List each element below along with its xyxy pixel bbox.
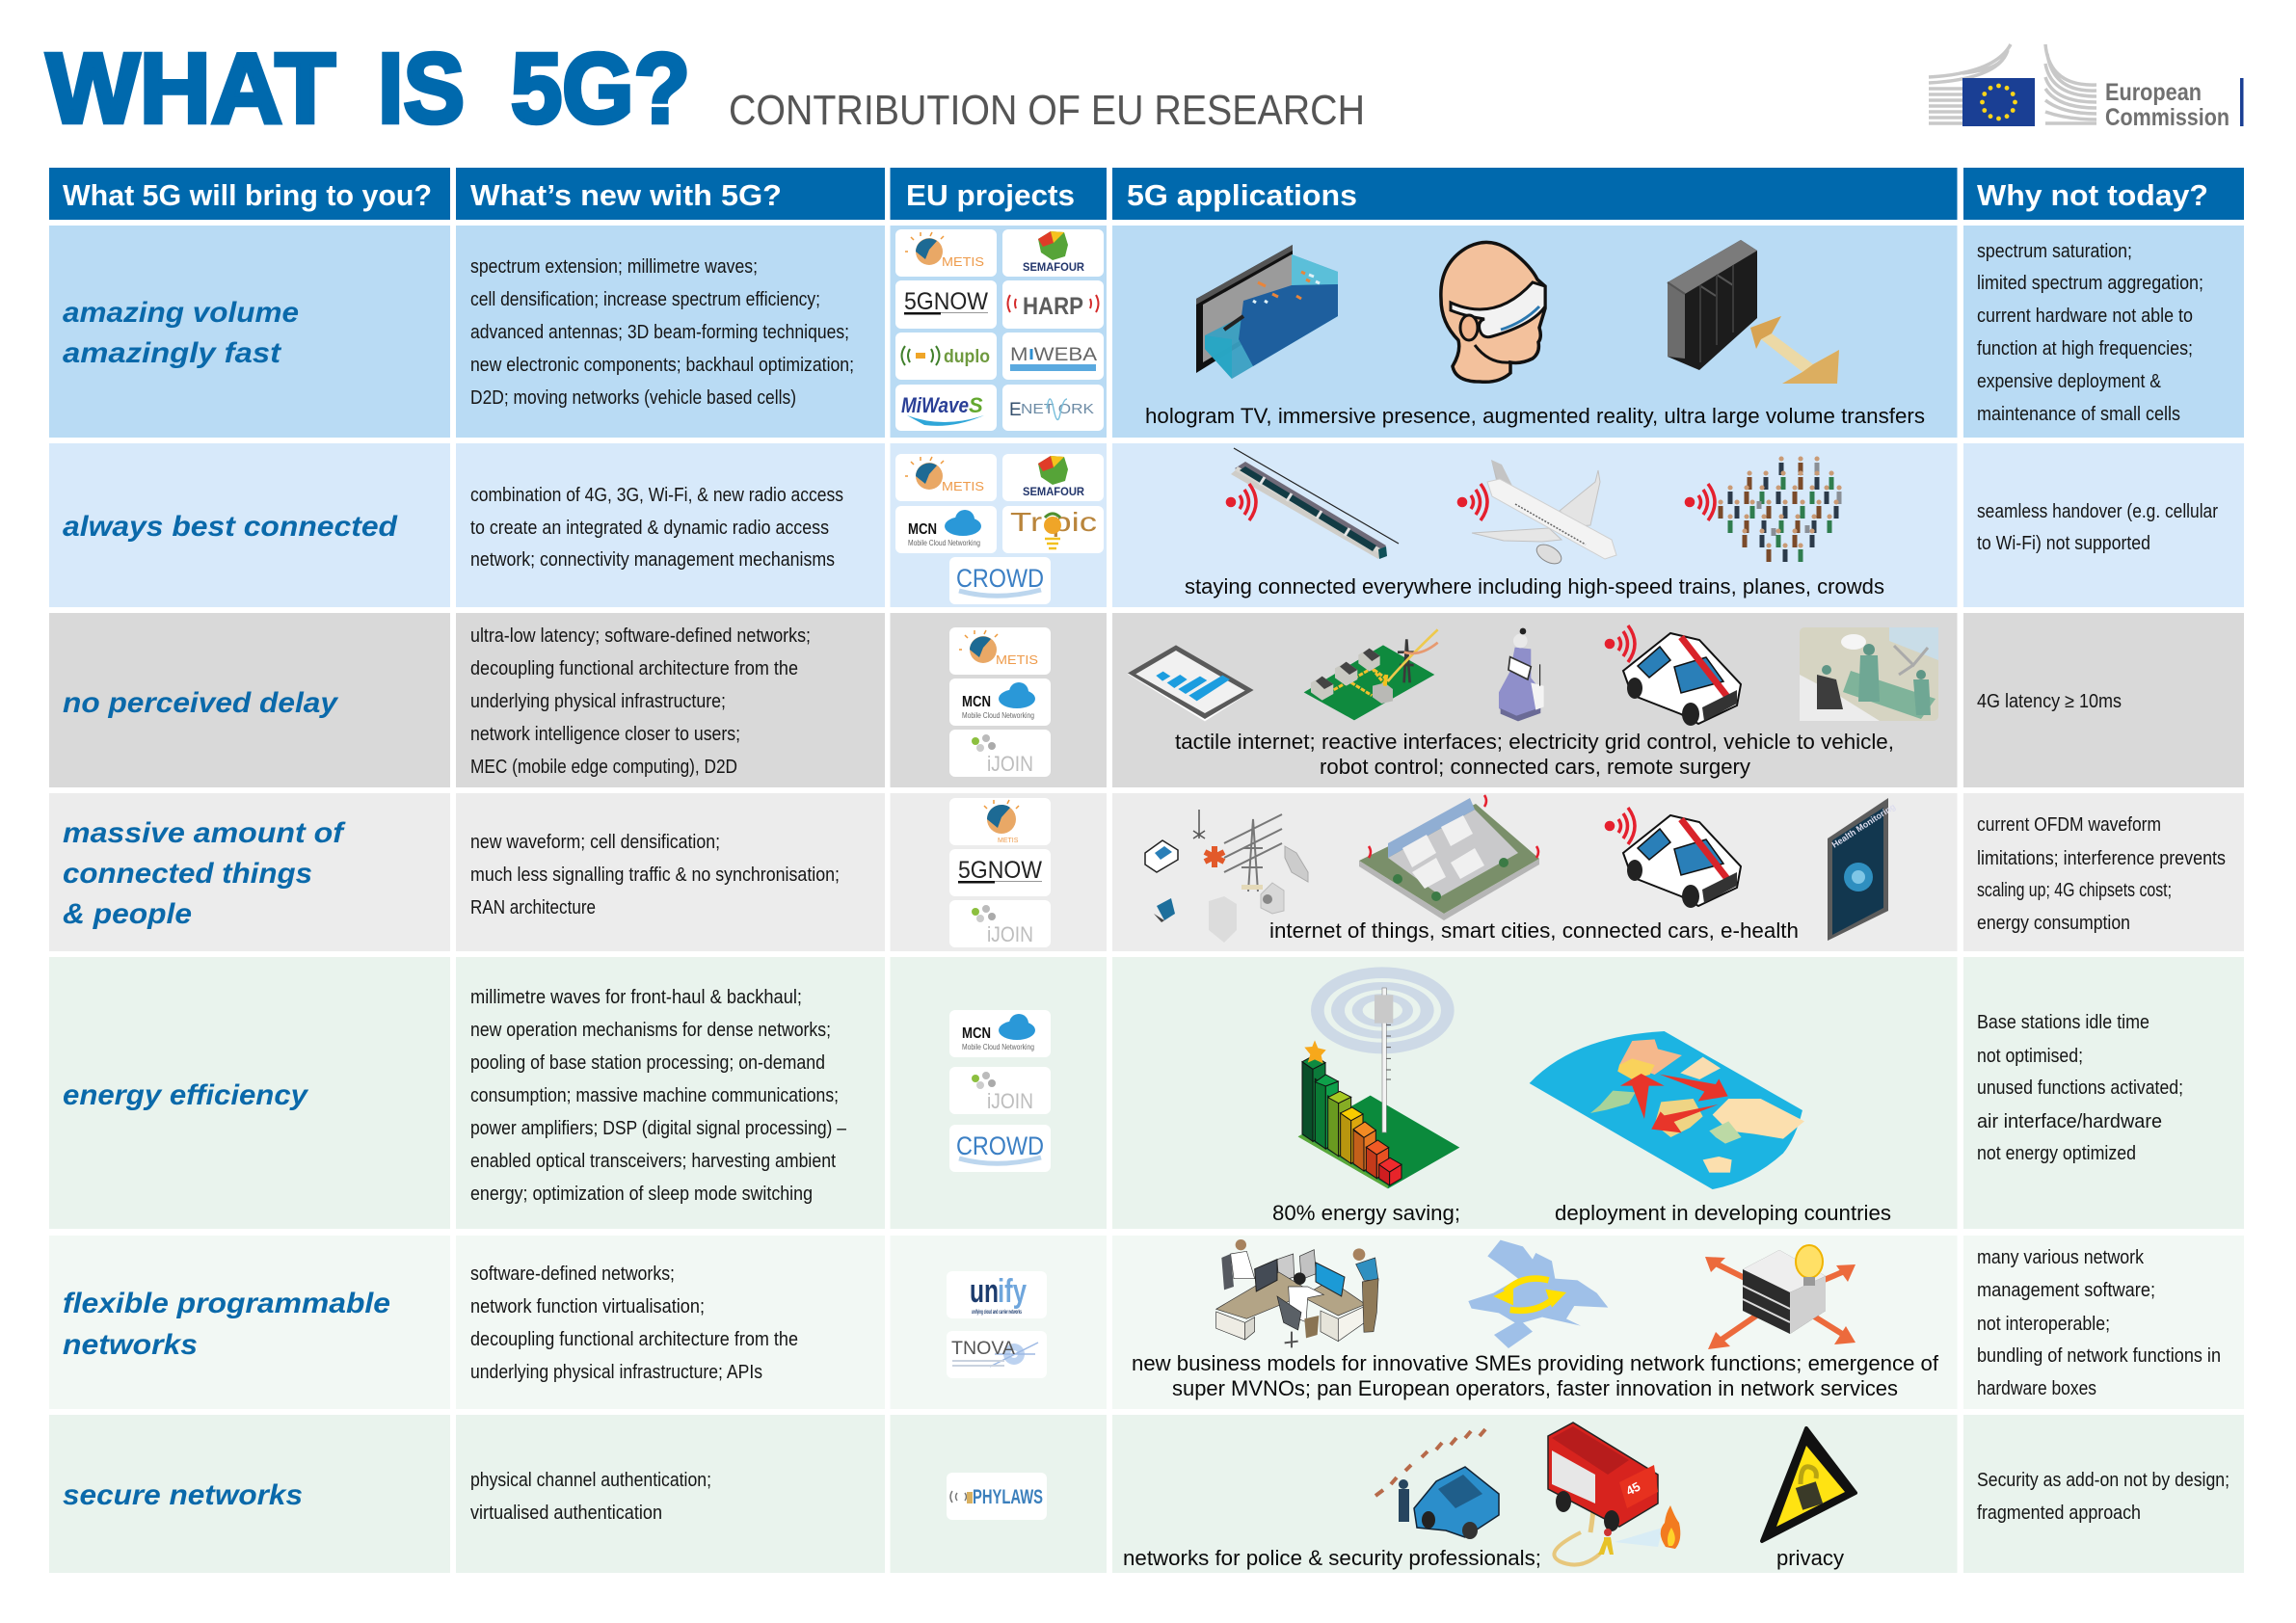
what's new text: enabled optical transceivers; harvesting ambient (470, 1151, 836, 1172)
why not today text: fragmented approach (1977, 1503, 2141, 1524)
icon: fire truck and firefighter: 45 (1623, 1479, 1642, 1499)
icon: tactile tablet (1128, 645, 1254, 721)
what's new text: software-defined networks; (470, 1264, 675, 1285)
icon: police car and officer (1375, 1429, 1499, 1539)
project logos (895, 229, 1104, 431)
logo: MiWEBA (1002, 333, 1104, 380)
project logos (949, 798, 1051, 947)
icon: antenna and energy bars (1298, 967, 1459, 1188)
icon: fire truck and firefighter (1548, 1423, 1680, 1565)
what's new text: MEC (mobile edge computing), D2D (470, 757, 737, 778)
what's new text: new operation mechanisms for dense networks; (470, 1020, 831, 1041)
why not today text: current hardware not able to (1977, 306, 2193, 327)
label: flexible programmable (63, 1288, 390, 1319)
label: energy efficiency (63, 1079, 308, 1111)
logo: iJOIN (949, 1067, 1051, 1114)
label: no perceived delay (63, 687, 338, 719)
logo: E3NETWORK (1002, 385, 1104, 431)
logo: MCN: MCN (962, 1025, 991, 1042)
logo: CROWD: CROWD (956, 1131, 1044, 1160)
what's new text: underlying physical infrastructure; APIs (470, 1362, 762, 1383)
heading: 5G applications: 5G applications (1127, 178, 1357, 212)
title: IS (378, 33, 465, 144)
why not today text: current OFDM waveform (1977, 814, 2161, 836)
icon: Europe map with circular arrows (1468, 1240, 1608, 1348)
logo: 5GNOW (949, 849, 1051, 896)
icon: electricity grid (1304, 629, 1438, 720)
row 1: amazing volume, amazingly fast (49, 226, 2244, 438)
applications: VR head (1441, 242, 1545, 382)
icon: connected car with signal (1605, 808, 1741, 908)
why not today text: expensive deployment & (1977, 371, 2162, 392)
logo: European Commission (1929, 44, 2244, 131)
logo: iJOIN: iJOIN (987, 1089, 1033, 1113)
logo: 5GNOW: 5GNOW (904, 288, 988, 315)
what's new text: new waveform; cell densification; (470, 832, 720, 853)
label: amazing volume (63, 297, 299, 329)
logo: METIS (895, 229, 997, 277)
what's new text: to create an integrated & dynamic radio access (470, 518, 829, 539)
label (63, 817, 346, 930)
logo: METIS: METIS (942, 254, 984, 269)
why not today text: maintenance of small cells (1977, 404, 2180, 425)
why not today text (1977, 501, 2218, 554)
logo: MCN (895, 506, 997, 553)
caption: deployment in developing countries (1555, 1201, 1891, 1225)
why not today text: management software; (1977, 1280, 2155, 1301)
logo: unify: un (970, 1273, 999, 1310)
logo: METIS (949, 627, 1051, 675)
why not today text: scaling up; 4G chipsets cost; (1977, 880, 2172, 901)
logo: SEMAFOUR (1002, 454, 1104, 501)
why not today text: air interface/hardware (1977, 1111, 2162, 1132)
row 6: flexible programmable networks (49, 1236, 2244, 1409)
what's new text: advanced antennas; 3D beam-forming techniques; (470, 322, 849, 343)
logo: MiWaveS: MiWave (901, 393, 969, 417)
logo: duplo (895, 333, 997, 380)
logo: SEMAFOUR (1002, 229, 1104, 277)
logo: European Commission: Commission (2105, 104, 2229, 131)
logo: MiWEBA: M WEBA (1010, 345, 1097, 365)
heading: EU projects: EU projects (906, 178, 1075, 212)
logo: MiWaveS: S (969, 393, 983, 417)
icon: e-health tablet: Health Monitoring (1830, 802, 1897, 850)
label: massive amount of (63, 817, 346, 849)
icon: connected car with signal (1605, 625, 1741, 726)
why not today text (1977, 1247, 2221, 1399)
title: 5G? (511, 33, 690, 144)
logo: CROWD (949, 557, 1051, 604)
why not today text: spectrum saturation; (1977, 241, 2132, 262)
caption: networks for police & security professionals; (1123, 1546, 1541, 1570)
caption: staying connected everywhere including high-speed trains, planes, crowds (1185, 574, 1884, 599)
caption: super MVNOs; pan European operators, faster innovation in network services (1172, 1376, 1898, 1400)
what's new text (470, 485, 843, 571)
what's new text: RAN architecture (470, 897, 596, 918)
logo: METIS small: METIS (998, 838, 1019, 844)
logo: E3NETWORK: NET ORK (1021, 401, 1094, 417)
icon: privacy warning triangle (1762, 1428, 1855, 1541)
what's new text: pooling of base station processing; on-demand (470, 1052, 825, 1074)
logo: CROWD: CROWD (956, 564, 1044, 593)
why not today text (1977, 1470, 2229, 1524)
logo: METIS: METIS (942, 479, 984, 493)
logo: CROWD (949, 1125, 1051, 1172)
title (46, 33, 690, 144)
caption (1132, 1351, 1939, 1400)
logo: MCN (949, 1010, 1051, 1057)
logo: unify: unifying cloud and carrier networks (972, 1309, 1022, 1316)
what's new text (470, 832, 840, 918)
why not today text: not energy optimized (1977, 1143, 2136, 1164)
heading: why not today: Why not today? (1977, 178, 2208, 212)
why not today text: 4G latency ≥ 10ms (1977, 691, 2122, 712)
project logos (949, 1010, 1051, 1172)
what's new text: millimetre waves for front-haul & backhaul; (470, 987, 802, 1008)
what's new text: underlying physical infrastructure; (470, 691, 726, 712)
caption (1175, 730, 1894, 779)
what's new text: ultra-low latency; software-defined networks; (470, 625, 811, 647)
logo: MCN: Mobile Cloud Networking (962, 1043, 1034, 1051)
caption: hologram TV, immersive presence, augmented reality, ultra large volume transfers (1145, 404, 1925, 428)
applications: hologram TV (1196, 245, 1338, 379)
what's new text: physical channel authentication; (470, 1470, 711, 1491)
logo: SEMAFOUR: SEMAFOUR (1023, 262, 1085, 274)
icon: remote surgery (1800, 627, 1938, 721)
what's new text (470, 1470, 711, 1524)
logo: SEMAFOUR: SEMAFOUR (1023, 487, 1085, 498)
caption (1272, 1201, 1891, 1225)
caption: new business models for innovative SMEs providing network functions; emergence of (1132, 1351, 1939, 1375)
row 4: massive amount of connected things and people (49, 793, 2244, 951)
logo: T-NOVA: TNOVA (951, 1339, 1015, 1359)
logo: MCN: MCN (962, 694, 991, 710)
logo: MCN (949, 678, 1051, 726)
logo: 5GNOW: 5GNOW (958, 857, 1042, 884)
logo: MCN: Mobile Cloud Networking (962, 711, 1034, 720)
what's new text: network intelligence closer to users; (470, 724, 740, 745)
why not today text: hardware boxes (1977, 1378, 2096, 1399)
why not today text: not interoperable; (1977, 1314, 2110, 1335)
why not today text: energy consumption (1977, 913, 2130, 934)
what's new text: energy; optimization of sleep mode switching (470, 1184, 813, 1205)
row 7: secure networks (49, 1415, 2244, 1573)
project logos (895, 454, 1104, 604)
what's new text (470, 256, 854, 409)
logo: PHYLAWS (947, 1473, 1047, 1520)
logo: METIS: METIS (996, 652, 1038, 667)
why not today text (1977, 1012, 2183, 1164)
what's new text (470, 625, 811, 778)
what's new text: cell densification; increase spectrum efficiency; (470, 289, 820, 310)
what's new text: decoupling functional architecture from the (470, 658, 798, 679)
why not today text: unused functions activated; (1977, 1078, 2183, 1099)
logo: METIS small (949, 798, 1051, 845)
what's new text: power amplifiers; DSP (digital signal processing) – (470, 1118, 847, 1139)
logo: Tropic (1002, 506, 1104, 553)
logo: duplo: duplo (944, 347, 990, 367)
why not today text: limitations; interference prevents (1977, 848, 2226, 869)
what's new text: consumption; massive machine communications; (470, 1085, 839, 1106)
what's new text: much less signalling traffic & no synchronisation; (470, 865, 840, 886)
caption: robot control; connected cars, remote surgery (1320, 755, 1750, 779)
logo: HARP (1002, 280, 1104, 329)
what's new text: decoupling functional architecture from the (470, 1329, 798, 1350)
label: networks (63, 1329, 198, 1361)
logo: iJOIN (949, 730, 1051, 777)
what's new text: network; connectivity management mechanisms (470, 549, 835, 571)
caption (1123, 1546, 1844, 1570)
why not today text (1977, 814, 2226, 934)
caption: internet of things, smart cities, connected cars, e-health (1269, 918, 1799, 943)
subtitle: CONTRIBUTION OF EU RESEARCH (729, 87, 1365, 134)
logo: Tropic: Tr pic (1010, 507, 1097, 537)
caption: 80% energy saving; (1272, 1201, 1460, 1225)
caption: tactile internet; reactive interfaces; electricity grid control, vehicle to vehicle, (1175, 730, 1894, 754)
what's new text: D2D; moving networks (vehicle based cells) (470, 387, 796, 409)
icon: smart city (1359, 795, 1539, 920)
project logos (947, 1271, 1047, 1378)
row 3: no perceived delay (49, 613, 2244, 787)
logo: iJOIN: iJOIN (987, 922, 1033, 946)
table header row (49, 168, 2244, 220)
title: WHAT (46, 33, 335, 144)
heading: what's new: What’s new with 5G? (470, 178, 782, 212)
row 5: energy efficiency (49, 957, 2244, 1229)
icon: crowd with signal (1685, 459, 1839, 562)
why not today text: seamless handover (e.g. cellular (1977, 501, 2218, 522)
logo: E3NETWORK: E (1009, 400, 1022, 420)
icon: plane with signal (1457, 460, 1616, 568)
heading: what 5G will bring: What 5G will bring to you? (63, 178, 432, 212)
label: secure networks (63, 1479, 303, 1511)
logo: MCN: Mobile Cloud Networking (908, 539, 980, 547)
row 2: always best connected (49, 443, 2244, 607)
icon: world map with arrows (1530, 1031, 1804, 1189)
why not today text: Base stations idle time (1977, 1012, 2149, 1033)
icon: e-health tablet (1828, 798, 1897, 941)
why not today text: not optimised; (1977, 1046, 2083, 1067)
why not today text: many various network (1977, 1247, 2145, 1268)
label: amazingly fast (63, 337, 282, 369)
what's new text: network function virtualisation; (470, 1296, 705, 1317)
icon: server with orange arrows and bulb (1705, 1245, 1855, 1349)
logo: METIS (895, 454, 997, 501)
label: always best connected (63, 511, 398, 543)
label: & people (63, 898, 192, 930)
why not today text: to Wi-Fi) not supported (1977, 533, 2150, 554)
logo: 5GNOW (895, 280, 997, 329)
why not today text: limited spectrum aggregation; (1977, 273, 2203, 294)
label (63, 297, 299, 369)
what's new text: combination of 4G, 3G, Wi-Fi, & new radio access (470, 485, 843, 506)
label: connected things (63, 858, 312, 890)
what's new text: virtualised authentication (470, 1503, 662, 1524)
what's new text: spectrum extension; millimetre waves; (470, 256, 758, 278)
project logos (949, 627, 1051, 777)
logo: iJOIN: iJOIN (987, 752, 1033, 776)
logo: iJOIN (949, 900, 1051, 947)
why not today text (1977, 241, 2203, 425)
what's new text: new electronic components; backhaul optimization; (470, 355, 854, 376)
what's new text (470, 987, 847, 1205)
applications: server rack and transfer arrow (1668, 240, 1839, 384)
icon: office team (1216, 1239, 1378, 1347)
logo: European Commission: European (2105, 79, 2202, 106)
logo: unify: ify (998, 1273, 1027, 1310)
label (63, 1288, 390, 1361)
logo: unify (947, 1271, 1047, 1318)
logo: PHYLAWS: PHYLAWS (973, 1486, 1043, 1508)
logo: MiWaveS (895, 385, 997, 431)
logo: HARP: HARP (1023, 293, 1083, 320)
caption: privacy (1776, 1546, 1844, 1570)
logo: MCN: MCN (908, 521, 937, 538)
icon: internet of things devices (1145, 810, 1308, 943)
why not today text: Security as add-on not by design; (1977, 1470, 2229, 1491)
why not today text: bundling of network functions in (1977, 1345, 2221, 1367)
what's new text (470, 1264, 798, 1383)
icon: train with signal (1226, 448, 1399, 559)
why not today text: function at high frequencies; (1977, 338, 2193, 359)
icon: robot (1499, 628, 1544, 721)
